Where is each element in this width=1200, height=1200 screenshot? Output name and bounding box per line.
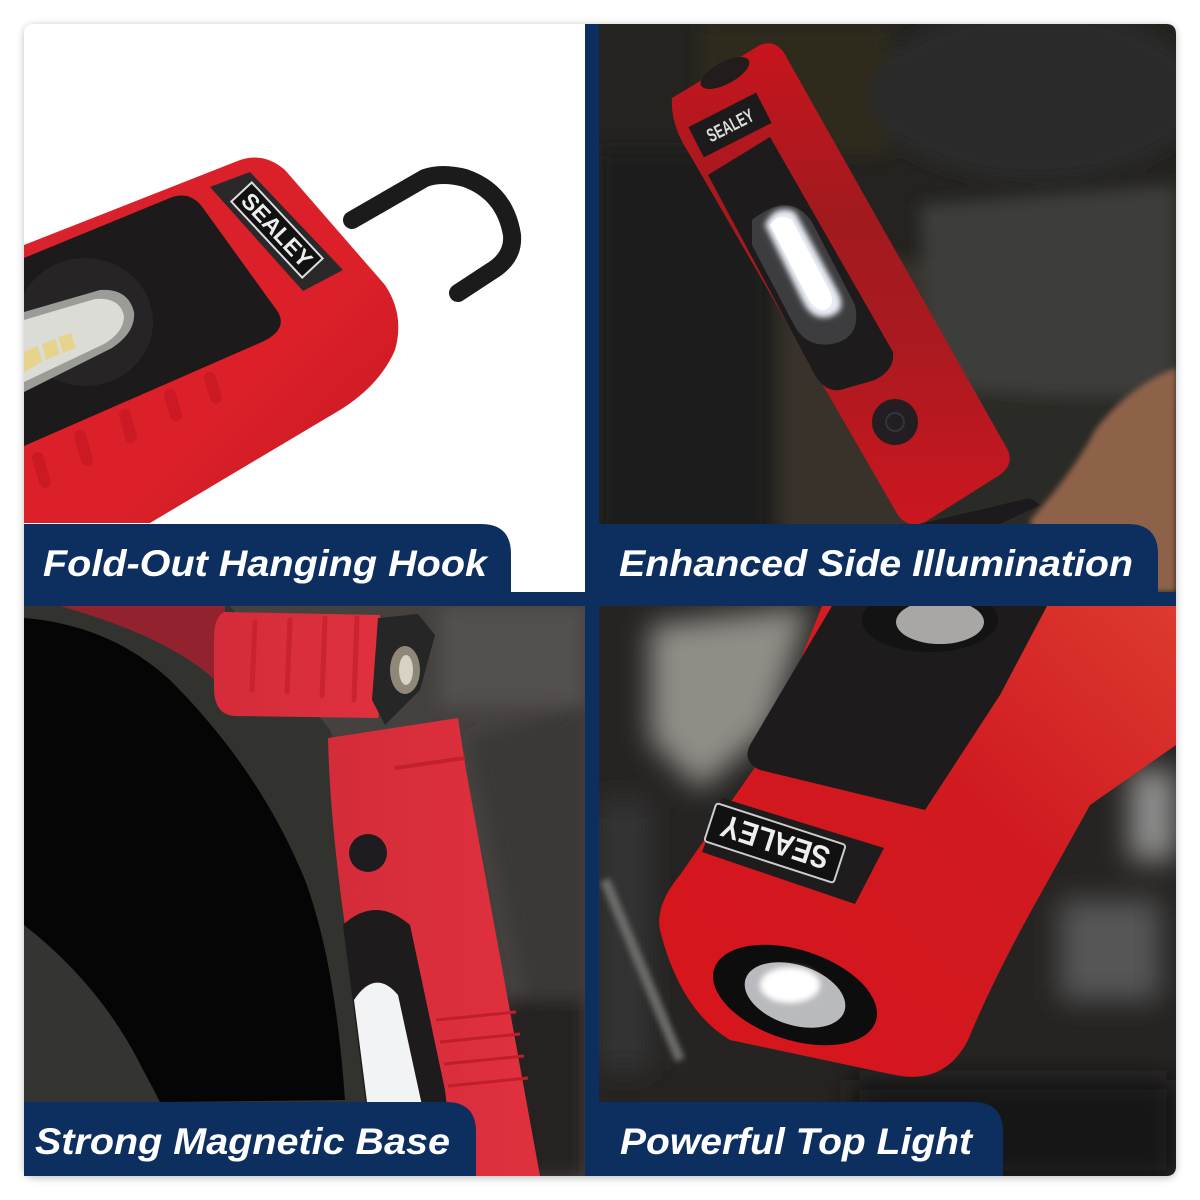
lower tyre (24, 925, 143, 1070)
power button (349, 834, 387, 872)
top light lens (712, 944, 877, 1046)
label: strong magnetic base (24, 1102, 476, 1176)
logo plate (210, 172, 343, 291)
black front panel (24, 196, 281, 446)
panel: enhanced side illumination (599, 10, 1200, 592)
torch body (659, 606, 1176, 1077)
glowing LED strip (752, 205, 856, 345)
rod (605, 880, 680, 1060)
hand (1030, 368, 1176, 592)
power symbol (886, 413, 904, 431)
top lens (700, 57, 750, 89)
torch body (672, 43, 1010, 524)
black front panel (708, 137, 893, 390)
torch base (915, 498, 1040, 525)
ribs (252, 618, 357, 700)
grip ridges (436, 1012, 528, 1086)
logo plate: SEALEY (716, 808, 834, 876)
power button (872, 399, 918, 445)
torch head (214, 612, 386, 718)
lens (896, 606, 984, 644)
label: powerful top light (585, 1102, 1003, 1176)
label: strong magnetic base: Strong Magnetic Base (35, 1121, 450, 1162)
label: powerful top light: Powerful Top Light (620, 1121, 974, 1162)
label: enhanced side illumination: Enhanced Side Illumination (619, 543, 1133, 584)
cable / arm (60, 606, 225, 679)
torch body (24, 158, 398, 523)
pivot lens (372, 614, 435, 725)
torch lower body (328, 718, 540, 1176)
LED window (17, 258, 153, 392)
logo plate: SEALEY (704, 106, 758, 147)
logo plate (702, 798, 884, 904)
glowing LED strip (354, 983, 423, 1110)
icon: hanging hook (352, 175, 512, 293)
wheel arch (24, 618, 345, 1102)
lens recess (862, 606, 998, 652)
tyre (24, 606, 366, 1102)
black front panel (748, 606, 1047, 810)
black front panel (343, 910, 446, 1102)
logo plate (688, 93, 772, 157)
panel: fold-out hanging hook (17, 24, 585, 592)
label: fold-out hanging hook (24, 524, 511, 592)
body ridge (395, 758, 465, 768)
label: enhanced side illumination (585, 524, 1158, 592)
panel: strong magnetic base (24, 606, 585, 1176)
panel: powerful top light (599, 588, 1176, 1180)
logo plate: SEALEY (236, 187, 318, 273)
label: fold-out hanging hook: Fold-Out Hanging Hook (43, 543, 490, 584)
body ribs (38, 378, 216, 482)
